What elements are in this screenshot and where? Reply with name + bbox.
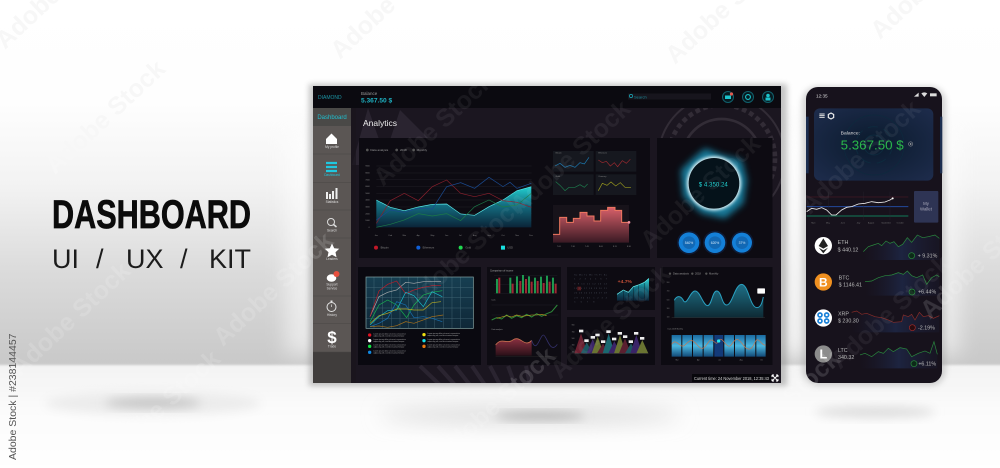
- calendar: 29 30 31 1 2 3 4: [574, 297, 607, 299]
- legend: adipiscing elit, sed do eiusmod tempor: [373, 352, 405, 355]
- strip chart: [668, 328, 766, 361]
- panel: phone: [806, 87, 942, 383]
- sidebar item: Support Service: Support: [326, 282, 338, 286]
- icon: menu: [819, 114, 825, 117]
- step area chart: 7:00: [557, 246, 562, 248]
- small chart: blue: Bitcoin: [556, 152, 562, 155]
- calendar: 22 23 24 25 26 27 28: [574, 293, 607, 295]
- sidebar item: Statistics: Statistics: [326, 200, 339, 204]
- legend: adipiscing elit, sed do eiusmod tempor: [373, 346, 405, 349]
- status: current time: [692, 374, 771, 382]
- donut: 37%: 37%: [739, 241, 745, 245]
- balance label: Balance:: [841, 130, 860, 136]
- y axis and month labels: [365, 166, 533, 237]
- calendar: 1 2 3 4 5 6 7: [574, 279, 607, 281]
- axis labels: [572, 325, 648, 353]
- small chart: red: Ethereum: [598, 152, 607, 155]
- balance: [361, 91, 392, 104]
- wave area: 500: [667, 299, 669, 301]
- gauge value: $ 4.350.24: [699, 181, 728, 188]
- calendar: [574, 274, 607, 304]
- panel: balance eclipse gauge: [657, 138, 772, 258]
- icon: expand: [772, 375, 778, 381]
- sidebar item: Search: [327, 218, 337, 232]
- panel: multi-line grid chart: [358, 267, 481, 365]
- heading: comparison of income: Comparison of income: [490, 270, 514, 273]
- area chart: data analysis: Data analysis: [492, 328, 503, 331]
- row: ETH: $ 440.12: [838, 247, 858, 253]
- balance line chart: June: [841, 222, 846, 224]
- axis labels: 700: [572, 331, 575, 333]
- strip chart: Aug: [740, 358, 743, 361]
- y axis and month labels: 1000: [365, 220, 371, 222]
- chart filters: [366, 148, 428, 152]
- legend: Gold: [465, 246, 471, 250]
- legend: [368, 332, 460, 355]
- panel: dashboard window: [313, 86, 785, 385]
- y axis and month labels: May: [431, 235, 434, 237]
- sidebar item: Trade: Trade: [328, 344, 336, 348]
- legend: [374, 246, 513, 250]
- grid chart: [366, 277, 473, 328]
- button: My Wallet: Wallet: [920, 206, 933, 211]
- watermark: Adobe Stock: [368, 67, 956, 384]
- y axis and month labels: 2000: [365, 213, 371, 215]
- wave area: 100: [667, 317, 669, 319]
- small chart: green: Gold: [556, 176, 560, 178]
- icon: balance info: [908, 142, 913, 146]
- calendar: 15 16 17 18 19 20 21: [574, 288, 607, 290]
- small chart: yellow: Currency: [598, 175, 606, 178]
- eclipse glow: [681, 148, 747, 218]
- legend: Lorem ipsum dolor sit amet, consectetur: [427, 338, 460, 341]
- strip chart: Mar: [676, 359, 679, 361]
- legend: Ethereum: [423, 246, 435, 250]
- balance line chart: July: [857, 222, 860, 224]
- wave area: 700: [667, 291, 669, 293]
- strip chart: Data 2018 Monthly: [668, 328, 683, 331]
- donut: 540%: 540%: [685, 241, 693, 245]
- watermark on white: Adobe Stock: Adobe Stock: [40, 55, 171, 179]
- icon: notifications: [722, 92, 734, 102]
- sidebar item: Support Service: [326, 271, 340, 290]
- line series: Bitcoin: [376, 180, 531, 223]
- chart filters: 2018: [695, 272, 701, 276]
- subtitle: UI / UX / KIT: /: [180, 244, 188, 274]
- row: LTC: LTC: [838, 348, 848, 354]
- balance line chart: Mart: [811, 221, 816, 224]
- y axis and month labels: Nov: [515, 235, 519, 237]
- icon: settings: [742, 92, 754, 102]
- axis labels: 500: [572, 338, 575, 340]
- row: BTC: [815, 271, 939, 296]
- line chart: coin: Coin: [491, 299, 495, 301]
- watermark: Adobe Stock: Adobe Stock: [635, 130, 766, 254]
- watermark: Adobe Stock: Adobe Stock: [545, 260, 676, 384]
- y axis and month labels: Jul: [459, 235, 462, 237]
- sidebar item: Statistics: [326, 188, 339, 204]
- strip chart: Apr: [697, 358, 700, 361]
- legend: adipiscing elit, sed do eiusmod tempor: [373, 334, 405, 337]
- balance line chart: August: [868, 221, 875, 224]
- row: BTC: $ 1146.41: [839, 283, 862, 289]
- chart filters: Data analysis: [370, 148, 389, 152]
- growth value: +4.7%: [618, 279, 632, 285]
- legend: USD: [507, 246, 513, 250]
- legend: Lorem ipsum dolor sit amet, consectetur: [373, 332, 406, 335]
- row: XRP: $ 230.30: [838, 319, 859, 325]
- calendar: 8 9 10 11 12 13 14: [574, 283, 607, 285]
- y axis and month labels: Feb: [389, 235, 393, 237]
- step area chart: 8:15: [613, 246, 618, 248]
- calendar: 5 6 7 8: [574, 302, 594, 304]
- panel: wave area chart and strip chart: [661, 267, 772, 365]
- legend: Lorem ipsum dolor sit amet, consectetur: [373, 350, 406, 353]
- status bar: 12:35: [816, 94, 828, 99]
- sidebar item: History: [327, 300, 337, 317]
- search field: [628, 94, 711, 100]
- top bar: [313, 86, 781, 108]
- panel: comparison of income, coin and data charts: [487, 267, 561, 365]
- axis labels: 100: [572, 351, 575, 353]
- search field: Search: [634, 94, 647, 100]
- watermark on wall: Adobe Stock: Adobe Stock: [5, 257, 136, 381]
- sidebar item: Dashboard header: Dashboard: [317, 115, 347, 121]
- watermark: Adobe Stock: Adobe Stock: [505, 95, 636, 219]
- y axis and month labels: 9000: [365, 166, 371, 168]
- stock id vertical label: Adobe Stock | #238144457: [7, 333, 19, 460]
- chart filters: Monthly: [417, 148, 428, 152]
- row: ETH: [815, 235, 939, 260]
- sidebar item: History: History: [327, 313, 337, 317]
- watermark on wall: Adobe Stock: Adobe Stock: [95, 345, 226, 468]
- y axis and month labels: 6000: [365, 186, 371, 188]
- row: BTC: +6.44%: [918, 290, 936, 296]
- watermark on wall: Adobe Stock: Adobe Stock: [208, 227, 339, 351]
- sidebar item: Support Service: Service: [327, 286, 338, 290]
- balance card: [806, 108, 942, 181]
- watermark on white: Adobe Stock: [0, 0, 996, 179]
- y axis and month labels: Mar: [403, 234, 406, 237]
- legend: Lorem ipsum dolor sit amet, consectetur: [427, 332, 460, 335]
- chart filters: Monthly: [709, 272, 719, 276]
- watermark on wall: Adobe Stock: Adobe Stock: [715, 345, 846, 468]
- legend: adipiscing elit, sed do eiusmod tempor: [427, 340, 459, 343]
- calendar: Su Mo Tu We Th Fr Sa: [574, 274, 607, 276]
- icon: user: [762, 92, 774, 102]
- chart filters: Data analysis: [673, 272, 690, 276]
- balance line chart: May: [826, 222, 830, 224]
- legend: Lorem ipsum dolor sit amet, consectetur: [373, 344, 406, 347]
- row: XRP: -2.19%: [918, 325, 935, 331]
- row: LTC: 340.32: [838, 355, 854, 361]
- y axis and month labels: Sep: [487, 235, 492, 237]
- balance line chart: [807, 192, 908, 224]
- row: LTC: [815, 342, 937, 368]
- panel: calendar and growth chart: [567, 267, 655, 310]
- y axis and month labels: 0: [369, 227, 371, 229]
- balance line chart: October: [897, 221, 904, 224]
- sidebar item: Search: Search: [327, 228, 337, 232]
- y axis and month labels: 7000: [365, 179, 371, 181]
- y axis and month labels: 5000: [365, 193, 371, 195]
- subtitle: UI / UX / KIT: /: [96, 244, 104, 274]
- y axis and month labels: Oct: [501, 234, 505, 237]
- watermark: Adobe Stock: Adobe Stock: [825, 250, 956, 374]
- strip chart: Jun: [718, 359, 721, 361]
- subtitle: UI / UX / KIT: UX: [126, 244, 164, 274]
- panel: main analytics chart: [359, 138, 650, 258]
- legend: Lorem ipsum dolor sit amet, consectetur: [373, 338, 406, 341]
- balance line chart: September: [881, 221, 891, 224]
- icon: hexagon: [828, 113, 834, 119]
- balance: 5.367.50 $: [361, 98, 392, 104]
- growth area chart: [617, 278, 649, 301]
- sidebar item: Dashboard: Dashboard: [324, 173, 340, 177]
- bar chart: [494, 275, 557, 293]
- peak tooltips: [579, 330, 644, 343]
- row: LTC: L: [819, 348, 827, 362]
- row: XRP: [815, 309, 939, 332]
- wave area: 900: [667, 282, 669, 284]
- axis labels: 900: [572, 325, 575, 327]
- watermark: Adobe Stock: Adobe Stock: [368, 67, 499, 191]
- row: ETH: ETH: [838, 240, 848, 246]
- legend: adipiscing elit, sed do eiusmod tempor: [427, 334, 459, 337]
- sidebar item: Leaders: [325, 244, 339, 261]
- y axis and month labels: 3000: [365, 206, 371, 208]
- strip chart: Oct: [760, 358, 763, 361]
- heading: Analytics: Analytics: [363, 118, 397, 128]
- row: BTC: BTC: [839, 275, 849, 281]
- peaks: [574, 333, 648, 353]
- wave area: [667, 282, 765, 319]
- sidebar item: Dashboard: [324, 163, 340, 177]
- watermark: Adobe Stock: Adobe Stock: [795, 95, 926, 219]
- subtitle: UI / UX / KIT: KIT: [209, 244, 251, 274]
- row: XRP: XRP: [838, 311, 849, 317]
- balance: Balance: [361, 91, 378, 96]
- axis labels: 300: [572, 345, 575, 347]
- watermark: Adobe Stock: Adobe Stock: [400, 190, 531, 314]
- row: LTC: +6.11%: [918, 361, 936, 367]
- step area chart: [553, 205, 632, 248]
- subtitle: UI / UX / KIT: UI: [52, 244, 79, 274]
- status: current time: Current time: 24 November 2018, 12:35:43: [694, 376, 769, 381]
- legend: Bitcoin: [381, 246, 389, 250]
- phone shadow: [802, 86, 946, 386]
- floor shadows: [45, 391, 935, 424]
- background texture: [352, 95, 785, 385]
- step area chart: 8:00: [599, 246, 604, 248]
- row: ETH: + 9.31%: [918, 253, 938, 259]
- y axis and month labels: Jan: [375, 235, 378, 237]
- sidebar item: Leaders: Leaders: [326, 257, 338, 261]
- y axis and month labels: Dec: [529, 235, 533, 237]
- button: My Wallet: My: [923, 201, 930, 206]
- y axis and month labels: 4000: [365, 200, 371, 202]
- watermark on wall: Adobe Stock: [5, 200, 1000, 468]
- legend: adipiscing elit, sed do eiusmod tempor: [427, 346, 459, 349]
- watermark on wall: Adobe Stock: Adobe Stock: [430, 342, 561, 466]
- y axis and month labels: 8000: [365, 172, 371, 174]
- logo: DIAMOND: DIAMOND: [318, 95, 342, 101]
- balance value: 5.367.50 $: [841, 137, 904, 152]
- chart filters: [669, 272, 719, 276]
- y axis and month labels: Jun: [445, 235, 448, 237]
- step area chart: 7:30: [571, 246, 576, 248]
- wave area: 300: [667, 308, 669, 310]
- y axis and month labels: Aug: [473, 234, 477, 237]
- y axis and month labels: Apr: [417, 234, 420, 237]
- title: DASHBOARD: DASHBOARD: [52, 193, 251, 237]
- button: My Wallet: [914, 191, 938, 223]
- row: BTC: B: [819, 275, 828, 289]
- legend: Lorem ipsum dolor sit amet, consectetur: [427, 344, 460, 347]
- chart filters: 2018: [400, 148, 407, 152]
- line series: Gold: [376, 193, 531, 227]
- legend: adipiscing elit, sed do eiusmod tempor: [373, 340, 405, 343]
- sidebar item: My profile: [325, 134, 339, 149]
- donut: 620%: 620%: [711, 241, 719, 245]
- area series: USD: [376, 187, 531, 227]
- step area chart: 8:30: [627, 246, 632, 248]
- line series: Ethereum: [376, 177, 531, 220]
- step area chart: 7:45: [585, 246, 590, 248]
- sidebar: [313, 108, 356, 383]
- panel: peaks chart: [567, 317, 655, 365]
- sidebar item: My profile: My profile: [325, 145, 339, 149]
- sidebar item: Trade: $: [327, 328, 337, 347]
- dashboard window shadow: [309, 84, 787, 386]
